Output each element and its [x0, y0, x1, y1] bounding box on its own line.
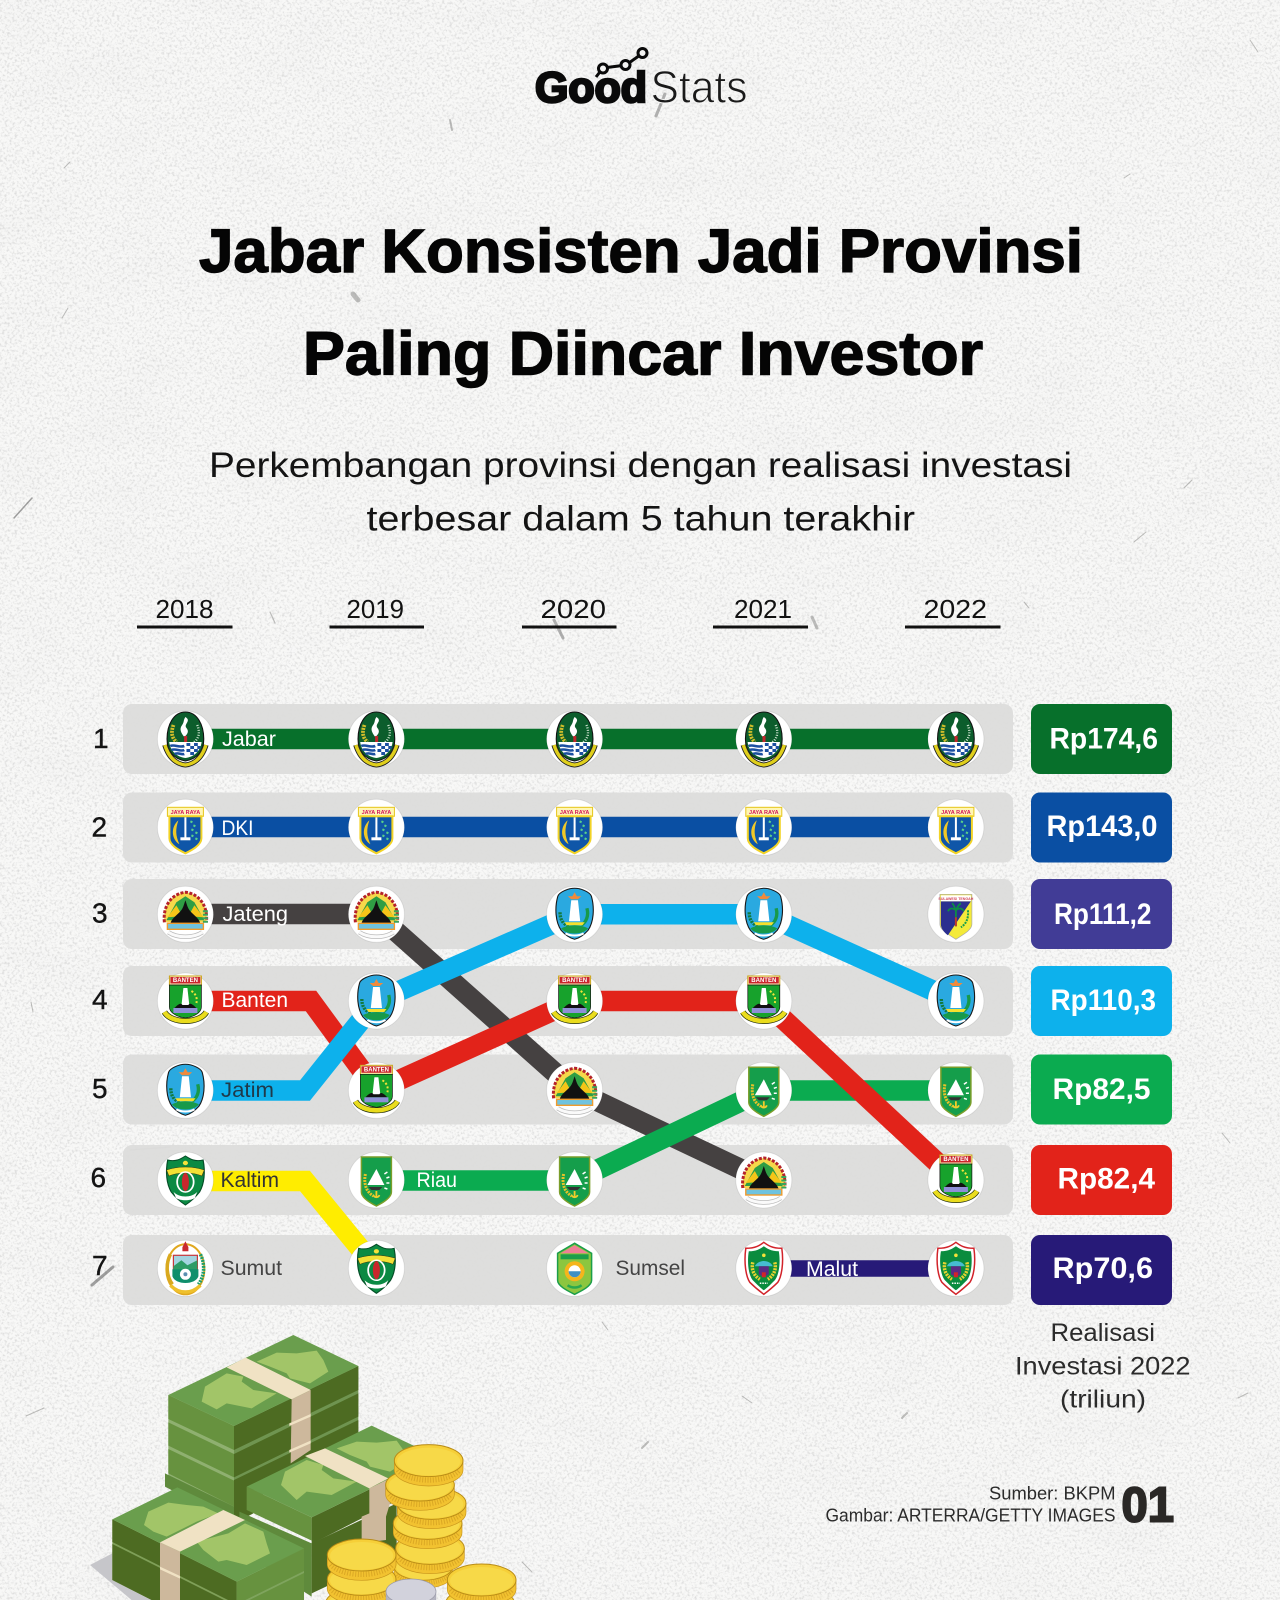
back money stack [165, 1335, 358, 1523]
middle money stack [239, 1426, 437, 1597]
title: Jabar Konsisten Jadi Provinsi [199, 217, 1083, 285]
province labels: Riau [416, 1169, 457, 1192]
badge Rp143,0: Rp143,0 [1046, 810, 1158, 843]
rank numbers: 4 [92, 984, 108, 1015]
line: Malut [764, 1260, 956, 1277]
line: Kaltim [185, 1181, 376, 1268]
badge Rp82,4 [1031, 1145, 1172, 1215]
rank numbers: 2 [92, 812, 107, 842]
province labels: Sumsel [616, 1257, 685, 1280]
line: Banten [185, 1001, 956, 1180]
investment value badges [1031, 704, 1172, 1305]
badge Rp174,6 [1031, 704, 1172, 774]
front money stack [112, 1487, 304, 1600]
year axis headers: 2020 [540, 594, 606, 624]
year axis headers: 2021 [734, 594, 792, 624]
emblems: rank 1 Jabar [157, 711, 984, 767]
line: Riau [376, 1090, 956, 1180]
province labels: Jateng [222, 903, 288, 926]
badge column caption: (triliun) [1060, 1386, 1146, 1414]
badge Rp110,3 [1031, 966, 1172, 1036]
page number: 01 [1122, 1478, 1174, 1532]
title [199, 217, 1083, 388]
badge Rp174,6: Rp174,6 [1050, 722, 1158, 756]
badge column caption: Investasi 2022 [1015, 1352, 1190, 1380]
rank numbers: 6 [90, 1162, 106, 1193]
badge Rp82,5: Rp82,5 [1052, 1073, 1150, 1106]
badge Rp143,0 [1031, 792, 1172, 862]
logo wordmark Stats: Stats [650, 62, 748, 112]
rank numbers: 1 [93, 723, 109, 754]
emblems: rank 4 Banten, Jatim [157, 973, 984, 1029]
province labels: Malut [806, 1258, 858, 1281]
rank numbers: 5 [92, 1073, 108, 1104]
ground shadow [90, 1553, 180, 1600]
line: Jabar [185, 729, 956, 749]
source note [826, 1484, 1116, 1526]
year axis headers: 2022 [924, 594, 987, 624]
logo chart line icon [596, 48, 647, 77]
title: Paling Diincar Investor [303, 320, 983, 388]
gold coin stack: short [326, 1539, 396, 1600]
emblems: rank 7 Sumut, Kaltim, Sumsel, Malut [157, 1240, 984, 1296]
rank numbers: 3 [92, 898, 108, 928]
subtitle [209, 446, 1072, 538]
badge Rp70,6: Rp70,6 [1052, 1252, 1153, 1285]
illustration: money stacks and coins [90, 1335, 516, 1600]
silver coin [386, 1579, 436, 1600]
ranking row backgrounds [123, 704, 1013, 1305]
emblems: rank 6 Kaltim, Riau, Jateng, Banten [157, 1152, 984, 1208]
rank numbers: 7 [92, 1250, 108, 1281]
source note: Gambar: ARTERRA/GETTY IMAGES [826, 1506, 1116, 1526]
emblems: rank 5 Jatim, Banten, Jateng, Riau [157, 1062, 984, 1118]
line: DKI [185, 817, 956, 837]
badge column caption [1015, 1319, 1190, 1414]
province labels: Jabar [222, 728, 276, 751]
province labels: Kaltim [220, 1169, 279, 1192]
gold coin stack: tall [386, 1445, 466, 1588]
emblems: rank 3 Jateng, Jatim, Sulteng [157, 886, 984, 942]
badge Rp110,3: Rp110,3 [1050, 984, 1156, 1017]
badge Rp111,2 [1031, 879, 1172, 949]
province labels: Banten [222, 989, 288, 1012]
badge Rp111,2: Rp111,2 [1054, 898, 1152, 931]
logo: GoodStats [535, 48, 748, 112]
logo wordmark Good: Good [535, 64, 647, 112]
badge Rp82,4: Rp82,4 [1058, 1162, 1155, 1196]
province labels [220, 728, 858, 1281]
province labels: Jatim [221, 1079, 274, 1102]
subtitle: Perkembangan provinsi dengan realisasi investasi [209, 446, 1072, 485]
bump chart lines [185, 739, 956, 1268]
province labels: DKI [222, 817, 254, 840]
year axis headers: 2019 [346, 594, 404, 624]
emblems: rank 2 DKI [157, 799, 984, 855]
source note: Sumber: BKPM [989, 1484, 1116, 1504]
line: Jateng [185, 914, 764, 1180]
year axis headers: 2018 [156, 594, 214, 624]
line: Jatim [185, 914, 956, 1090]
subtitle: terbesar dalam 5 tahun terakhir [366, 500, 915, 538]
rank numbers [90, 723, 109, 1281]
province labels: Sumut [220, 1257, 282, 1280]
badge Rp82,5 [1031, 1054, 1172, 1124]
gold coin stack: right [446, 1564, 516, 1600]
year axis headers [137, 594, 1000, 627]
badge column caption: Realisasi [1050, 1319, 1155, 1347]
badge Rp70,6 [1031, 1235, 1172, 1305]
